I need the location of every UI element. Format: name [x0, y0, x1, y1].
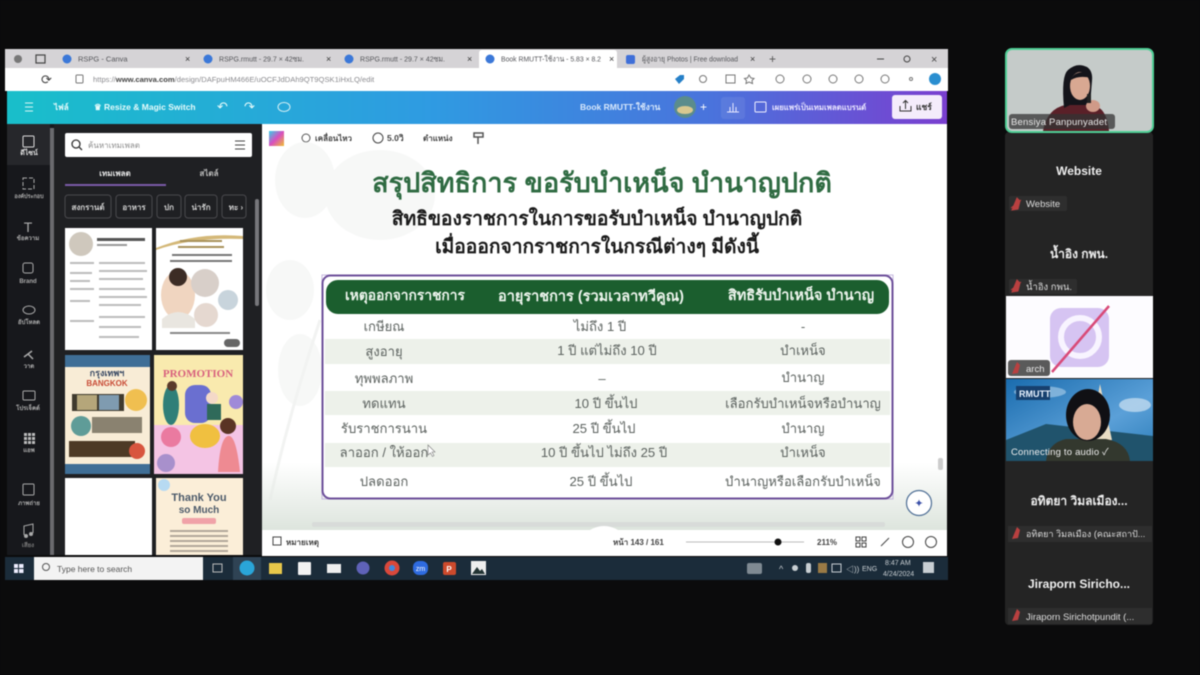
tab: RSPG.rmutt 1: RSPG.rmutt - 29.7 × 42ซม.: [219, 54, 304, 64]
participant: Website: Website: [1056, 164, 1102, 178]
tab: RSPG Canva: RSPG - Canva: [78, 54, 128, 64]
tab: Book RMUTT active: [479, 50, 617, 68]
thumbnail: Bangkok travel: กรุงเทพฯ: [90, 368, 124, 379]
scrollbar: [255, 199, 259, 306]
Canva header bar: ↶: [217, 99, 228, 114]
participant: arch: [1006, 296, 1153, 378]
tabs: สไตล์: [199, 168, 219, 178]
bottom status bar: หมายเหตุ: [286, 538, 319, 548]
row: ปลดออก: ปลดออก: [360, 474, 408, 489]
magic assistant button: ✦: [914, 498, 924, 510]
left sidebar rail: [7, 124, 65, 555]
icon: brand: Brand: [19, 279, 37, 285]
row: เกษียณ: [364, 319, 805, 334]
Canva header bar: +: [700, 100, 707, 114]
color swatch: [269, 131, 284, 146]
tabs: เทมเพลต: [99, 169, 131, 178]
participant: Website: [1009, 164, 1102, 211]
row: เกษียณ: ไม่ถึง 1 ปี: [573, 319, 626, 334]
Windows taskbar: [5, 557, 948, 580]
collapse handle: [262, 321, 269, 369]
tab: Book RMUTT active: Book RMUTT-ใช้งาน - 5.83 × 8.2: [501, 54, 601, 64]
address bar: https://www.canva.com/design/DAFpuHM466E/uOCFJdDAh9QT9QSK1iHxLQ/edit: [93, 75, 375, 84]
row: รับราชการนาน: 25 ปี ขึ้นไป: [573, 418, 635, 436]
icon: uploads: [18, 306, 40, 326]
icon: templates: ดีไซน์: [20, 148, 38, 157]
row: ทดแทน: ทดแทน: [362, 396, 406, 411]
thumbnail: Bangkok travel: [65, 355, 150, 474]
bottom status bar: 211%: [817, 538, 837, 547]
thumbnail: thank you: so Much: [179, 505, 219, 516]
thumbnail: teacher flyer: [156, 228, 243, 350]
participant: อทิตยา วิมลเมือง: อทิตยา วิมลเมือง...: [1030, 494, 1128, 508]
leaf background: [266, 142, 435, 500]
share button: [892, 95, 942, 119]
row: ลาออก / ให้ออก: [340, 442, 826, 460]
icon: draw: [24, 351, 34, 370]
participant: connecting to audio: [1006, 379, 1153, 461]
thumbnail: blank: [65, 478, 152, 555]
table header: [326, 280, 889, 314]
participant: น้ำอิง กพน.: น้ำอิง กพน.: [1026, 280, 1072, 293]
window controls: +: [769, 52, 776, 66]
row: ลาออก / ให้ออก: 10 ปี ขึ้นไป ไม่ถึง 25 ปี: [541, 442, 667, 460]
slide subtitle: สิทธิของราชการในการขอรับบำเหน็จ บำนาญปกติ: [391, 206, 802, 230]
taskbar app icons: zm: [416, 566, 425, 573]
system tray: ^: [779, 564, 784, 574]
category chips: สงกรานต์: [71, 202, 105, 212]
system tray: [747, 560, 934, 578]
search box: [34, 557, 203, 580]
row: ทุพพลภาพ: –: [598, 371, 606, 386]
participant: น้ำอิง กพน.: [1009, 244, 1108, 294]
thumbnail: thank you: [156, 478, 243, 555]
row: สูงอายุ: 1 ปี แต่ไม่ถึง 10 ปี: [557, 343, 657, 358]
icon: photos: ภาพถ่าย: [18, 500, 40, 507]
tab: Photos: ผู้สูงอายุ Photos | Free download: [642, 54, 738, 64]
icon: text: ข้อความ: [17, 234, 39, 242]
Canva header bar: ↷: [244, 99, 255, 114]
bottom status bar: [262, 526, 947, 556]
canvas scrollbars: [312, 522, 885, 527]
participant: น้ำอิง กพน.: น้ำอิง กพน.: [1050, 244, 1108, 261]
participant: connecting to audio: Connecting to audio ✓: [1011, 447, 1109, 458]
tab: RSPG.rmutt 2: ×: [467, 54, 472, 64]
tab: RSPG.rmutt 1: [204, 54, 331, 64]
category chips: ทะ ›: [229, 203, 244, 212]
search box: Type here to search: [57, 564, 132, 574]
search box: [65, 133, 252, 157]
browser toolbar icons: [675, 73, 941, 85]
thumbnail: resume: [65, 228, 152, 350]
slide title: สรุปสิทธิการ ขอรับบำเหน็จ บำนาญปกติ: [372, 165, 832, 200]
icon: audio: [22, 524, 34, 549]
participant gallery: [1005, 49, 1153, 625]
thumbnail: promotion: [154, 355, 243, 474]
icon: audio: เสียง: [22, 541, 34, 549]
zoom slider: [686, 538, 804, 546]
editor toolbar: เคลื่อนไหว: [315, 132, 353, 143]
participant: Bensiya Panpunyadet: [1006, 49, 1153, 132]
tab: Photos: ×: [750, 54, 755, 64]
icon: brand: [19, 263, 37, 285]
row stripes: [325, 339, 890, 467]
participant: Jiraporn Sirichotpundit: [1008, 577, 1152, 624]
window controls: [769, 52, 937, 66]
row: ทดแทน: เลือกรับบำเหน็จหรือบำนาญ: [725, 394, 881, 411]
table header: เหตุออกจากราชการ: [345, 288, 466, 304]
row: ทดแทน: 10 ปี ขึ้นไป: [575, 393, 637, 411]
tab: RSPG Canva: ×: [185, 54, 190, 64]
row: ทุพพลภาพ: ทุพพลภาพ: [355, 371, 413, 387]
category chips: ปก: [164, 203, 174, 212]
row: สูงอายุ: บำเหน็จ: [780, 341, 826, 358]
icon: projects: [15, 391, 40, 412]
category chips: น่ารัก: [191, 203, 211, 212]
participant: arch: arch: [1026, 364, 1044, 375]
benefits table: [322, 275, 893, 499]
share button: แชร์: [916, 102, 932, 112]
participant: Website: Website: [1026, 199, 1060, 210]
thumbnail: Bangkok travel: BANGKOK: [86, 379, 128, 388]
category chips: อาหาร: [122, 203, 146, 212]
icon: text: T: [24, 219, 33, 235]
thumbnail: promotion: PROMOTION: [163, 368, 233, 380]
icon: apps: แอพ: [23, 447, 35, 454]
template panel: [54, 124, 269, 555]
system tray: ◁)): [846, 565, 860, 574]
system tray: 8:47 AM: [885, 560, 911, 567]
magic assistant button: [906, 490, 932, 516]
editor toolbar: 5.0วิ: [387, 133, 404, 143]
row: รับราชการนาน: รับราชการนาน: [341, 421, 427, 436]
category chips: [65, 195, 246, 218]
tab: RSPG Canva: [62, 54, 190, 64]
row: ทดแทน: [362, 393, 881, 411]
icon: templates: [20, 136, 38, 157]
icon: elements: [14, 178, 44, 200]
Canva header bar: เผยแพร่เป็นเทมเพลตแบรนด์: [772, 101, 866, 112]
table header: สิทธิรับบำเหน็จ บำนาญ: [728, 285, 874, 304]
slide subtitle: [391, 206, 802, 258]
row: ทุพพลภาพ: บำนาญ: [781, 370, 825, 385]
profile avatar: [674, 96, 696, 118]
editor toolbar: [262, 124, 947, 152]
row: ลาออก / ให้ออก: ลาออก / ให้ออก: [340, 445, 428, 460]
participant: Jiraporn Sirichotpundit: Jiraporn Sirichotpundit (...: [1026, 612, 1134, 623]
Canva header bar: ไฟล์: [53, 102, 69, 112]
row: สูงอายุ: [365, 341, 826, 360]
icon: text: [17, 219, 39, 242]
mouse cursor: [428, 445, 435, 456]
participant: Bensiya Panpunyadet: Bensiya Panpunyadet: [1011, 117, 1107, 128]
tab: RSPG.rmutt 2: [344, 54, 472, 64]
address bar: [5, 68, 948, 91]
icon: apps: [23, 433, 35, 454]
search box: ค้นหาเทมเพลต: [88, 141, 140, 150]
Canva header bar: ♛ Resize & Magic Switch: [94, 102, 196, 112]
participant: อทิตยา วิมลเมือง: [1008, 494, 1152, 542]
participant: connecting to audio: RMUTT: [1019, 389, 1051, 399]
taskbar app icons: [213, 557, 486, 580]
tab: RSPG.rmutt 2: RSPG.rmutt - 29.7 × 42ซม.: [360, 54, 445, 64]
tabs: [65, 168, 219, 186]
Canva header bar: Book RMUTT-ใช้งาน: [580, 102, 661, 112]
window controls: ×: [931, 54, 937, 66]
row: เกษียณ: เกษียณ: [364, 319, 404, 334]
row: ปลดออก: 25 ปี ขึ้นไป: [570, 471, 632, 489]
editor toolbar: ตำแหน่ง: [423, 134, 453, 143]
icon: draw: วาด: [24, 363, 34, 370]
icon: projects: โปรเจ็คต์: [15, 403, 40, 412]
row: เกษียณ: -: [801, 319, 805, 334]
icon: photos: [18, 484, 40, 507]
row: ปลดออก: บำนาญหรือเลือกรับบำเหน็จ: [725, 472, 881, 489]
icon: elements: องค์ประกอบ: [14, 192, 44, 200]
system tray: 4/24/2024: [883, 571, 914, 578]
system tray: ENG: [862, 566, 877, 573]
row: สูงอายุ: สูงอายุ: [365, 344, 403, 360]
row: ปลดออก: [360, 471, 881, 489]
participant: Jiraporn Sirichotpundit: Jiraporn Siricho...: [1028, 577, 1130, 591]
row: รับราชการนาน: บำนาญ: [781, 421, 825, 436]
tab: Book RMUTT active: ×: [609, 54, 614, 64]
row: ลาออก / ให้ออก: บำเหน็จ: [780, 443, 826, 460]
thumbnail: thank you: Thank You: [171, 492, 227, 504]
tab: RSPG.rmutt 1: ×: [326, 54, 331, 64]
table header: อายุราชการ (รวมเวลาทวีคูณ): [498, 288, 684, 305]
slide subtitle: เมื่อออกจากราชการในกรณีต่างๆ มีดังนี้: [435, 232, 760, 258]
participant: อทิตยา วิมลเมือง: อทิตยา วิมลเมือง (คณะสถาปั...: [1026, 529, 1145, 539]
start button: [14, 564, 24, 573]
address bar: ⟳: [41, 72, 52, 87]
bottom status bar: หน้า 143 / 161: [613, 537, 664, 547]
taskbar app icons: P: [446, 565, 452, 574]
Canva header bar: [7, 91, 947, 124]
browser tab strip: [5, 49, 948, 68]
slide canvas: [262, 142, 947, 530]
icon: uploads: อัปโหลด: [18, 318, 40, 326]
row: รับราชการนาน: [341, 418, 825, 436]
row: ทุพพลภาพ: [355, 370, 825, 387]
